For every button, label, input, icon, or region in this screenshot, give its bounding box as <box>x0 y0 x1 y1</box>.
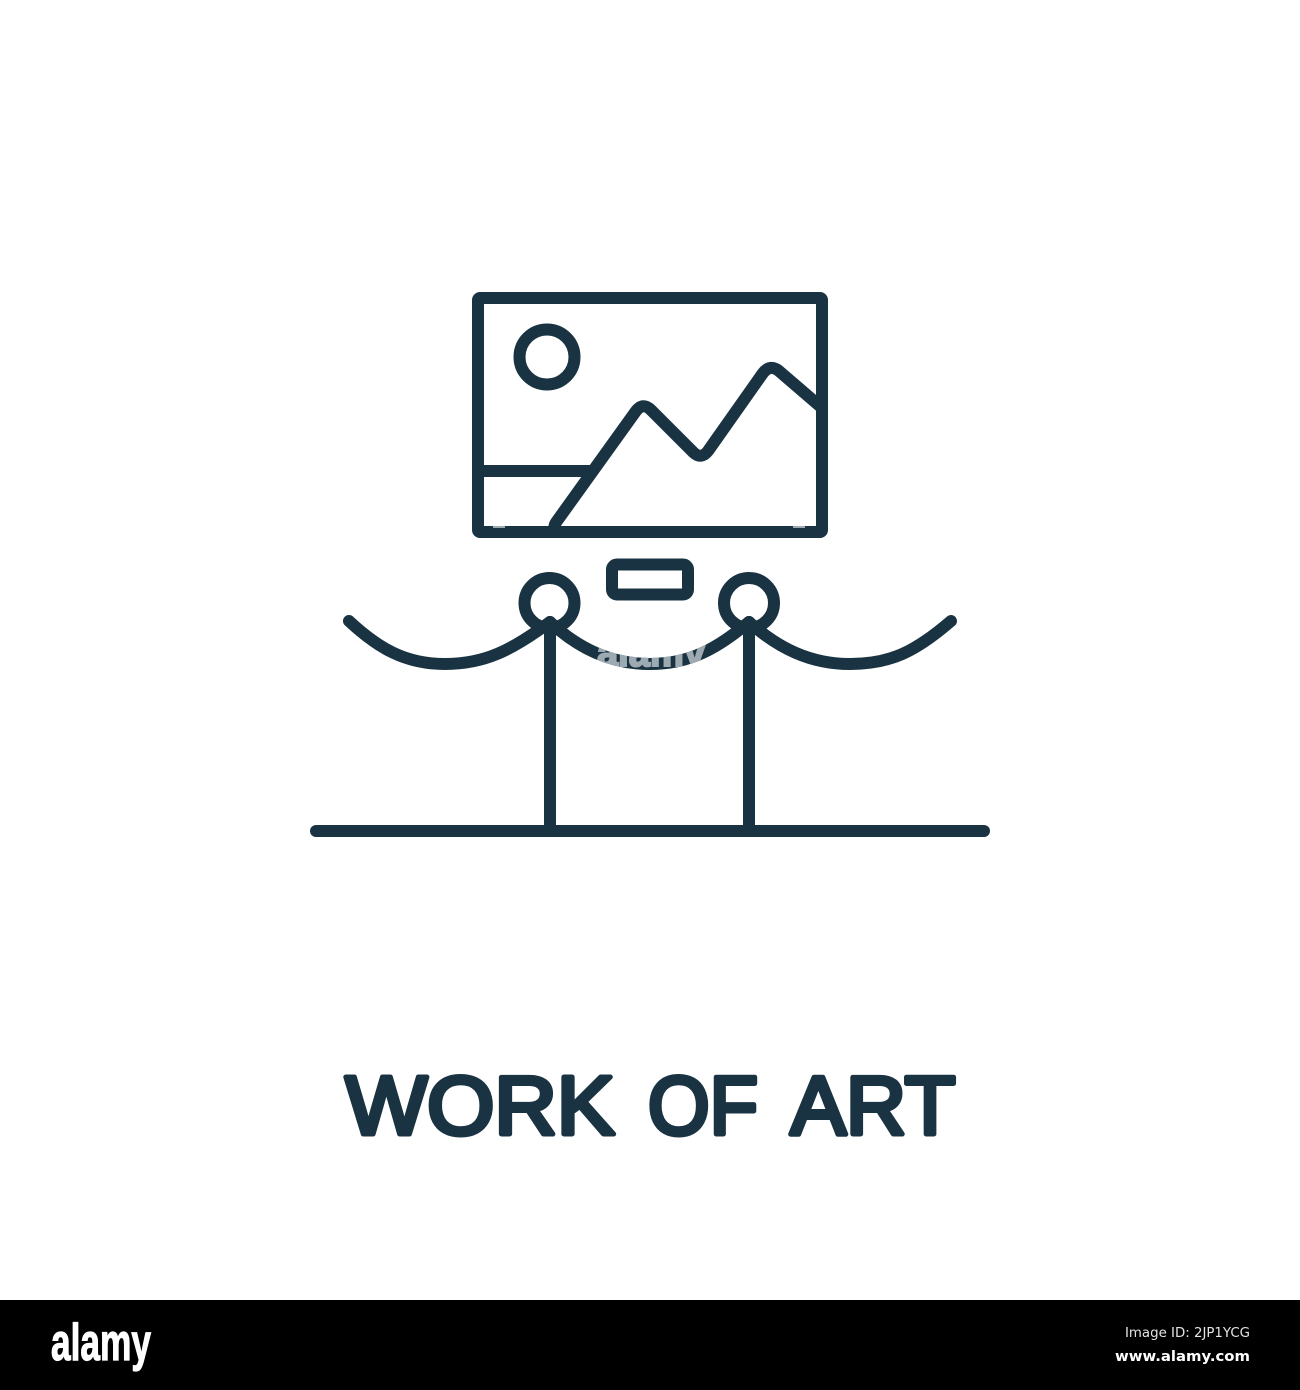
footer logo: alamy <box>51 1314 151 1372</box>
icon: right post ring <box>724 578 774 628</box>
title: WORK <box>346 1059 614 1152</box>
icon: sun <box>520 330 574 384</box>
icon: right post <box>743 622 755 831</box>
title: OF <box>648 1059 758 1152</box>
icon: left rope <box>349 621 550 664</box>
title: ART <box>790 1059 956 1152</box>
icon: plaque <box>612 564 688 594</box>
icon: ground line <box>316 825 984 837</box>
icon: left post <box>544 622 556 831</box>
title <box>346 1059 956 1152</box>
watermark on rope: alamy <box>597 631 706 675</box>
icon: left post ring <box>524 578 574 628</box>
icon: middle rope <box>550 622 749 664</box>
icon: mountains <box>554 368 822 532</box>
footer image id: Image ID: 2JP1YCG <box>1125 1326 1250 1341</box>
watermark traces on frame <box>493 526 805 528</box>
icon: picture frame <box>478 298 822 532</box>
icon: framed picture behind rope barrier <box>316 298 984 831</box>
icon: right rope <box>749 621 951 664</box>
footer bar <box>0 1300 1300 1390</box>
icon: horizon line <box>478 465 590 477</box>
footer url: www.alamy.com <box>1115 1349 1250 1365</box>
